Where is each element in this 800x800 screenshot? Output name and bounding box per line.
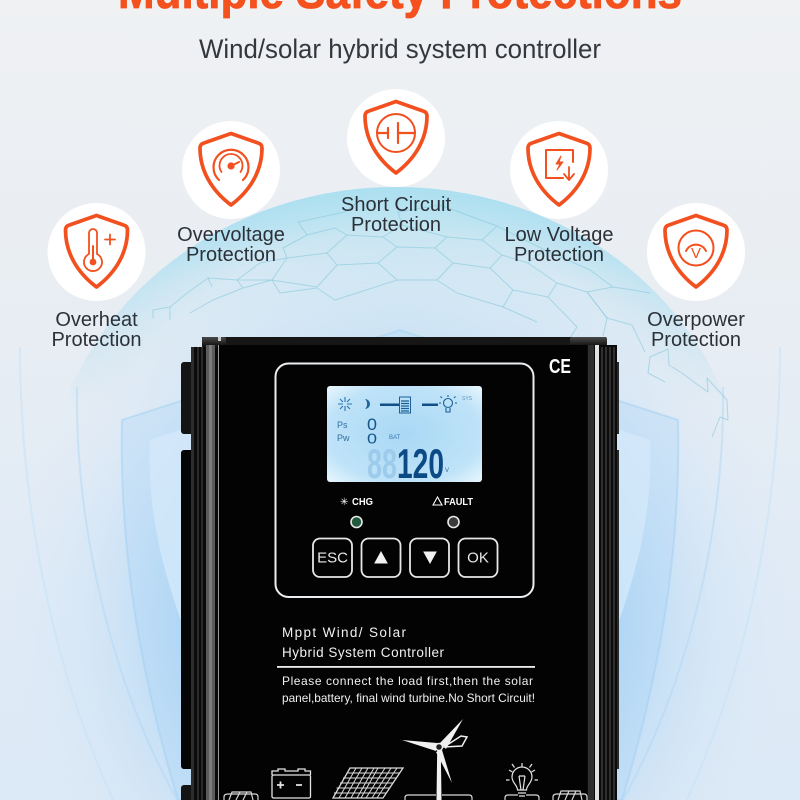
wiring warning: Please connect the load first,then the solar — [282, 674, 533, 688]
lcd: readouts: Ps — [337, 420, 348, 430]
CHG indicator — [340, 497, 373, 528]
icon badge: overheat protection — [48, 203, 146, 301]
top cap — [202, 337, 607, 347]
subtitle: Wind/solar hybrid system controller — [199, 34, 601, 64]
faint background shield outlines — [20, 330, 780, 800]
lcd: readouts: 88 — [367, 440, 397, 487]
divider line — [277, 666, 535, 668]
icon: small solar panel left — [224, 792, 258, 800]
left heat-sink ribs — [191, 345, 220, 800]
wiring warning — [282, 674, 535, 705]
label: low voltage protection: Low Voltage — [505, 224, 613, 246]
lcd: readouts: Pw — [337, 433, 350, 443]
hexagon dome — [74, 187, 728, 438]
lcd: readouts — [337, 396, 473, 487]
label: overvoltage protection — [177, 224, 285, 266]
icon: light bulb — [506, 763, 538, 796]
lcd: readouts: BAT — [389, 435, 401, 441]
lcd: readouts: 0 — [367, 415, 377, 434]
label: overpower protection — [647, 309, 745, 351]
label: overvoltage protection: Protection — [186, 244, 276, 266]
FAULT indicator: FAULT — [444, 497, 473, 508]
button: down — [410, 538, 449, 577]
label: overheat protection: Protection — [51, 329, 142, 351]
icon badge: overpower protection — [647, 203, 745, 301]
lcd: readouts: V — [445, 468, 449, 474]
lcd: readouts: SYS — [462, 396, 473, 402]
icon badge: low voltage protection — [510, 121, 608, 219]
control panel outline — [276, 364, 534, 597]
icon: outlined base shapes — [405, 795, 539, 800]
icon: wind turbine — [402, 719, 467, 800]
CHG indicator: ✳ — [340, 497, 348, 508]
icon: battery — [272, 769, 310, 798]
device name: Mppt Wind/ Solar — [282, 625, 406, 640]
lcd: sun icon — [338, 397, 352, 411]
CE mark: CE — [549, 356, 571, 378]
label: short circuit protection: Protection — [351, 214, 441, 236]
icon badge: overvoltage protection — [182, 121, 280, 219]
label: overpower protection: Protection — [651, 329, 741, 351]
button: OK: OK — [467, 550, 489, 566]
label: overpower protection: Overpower — [647, 309, 745, 331]
lcd: battery icon — [400, 397, 410, 413]
right heat-sink ribs — [587, 345, 617, 800]
label: overheat protection — [51, 309, 142, 351]
lcd: readouts: 0 — [367, 430, 377, 448]
lcd: readouts: 120 — [397, 440, 444, 487]
left mounting tabs — [181, 362, 195, 800]
label: overheat protection: Overheat — [55, 309, 138, 331]
device name: Hybrid System Controller — [282, 645, 444, 660]
label: overvoltage protection: Overvoltage — [177, 224, 285, 246]
label: low voltage protection: Protection — [514, 244, 604, 266]
icon badge: overpower protection: V — [691, 245, 701, 262]
lcd: bulb icon — [439, 395, 457, 412]
CHG indicator: CHG — [352, 497, 373, 508]
front face — [219, 345, 587, 800]
lcd: moon icon — [365, 399, 370, 409]
label: low voltage protection — [505, 224, 613, 266]
icon: solar panel — [333, 768, 403, 798]
device name — [282, 625, 444, 660]
icon badge: short circuit protection — [347, 89, 445, 187]
controller device — [181, 337, 619, 800]
button: ESC: ESC — [317, 550, 348, 566]
label: short circuit protection — [341, 194, 451, 236]
button: OK — [458, 538, 498, 577]
right mounting tabs — [615, 362, 619, 769]
LCD screen — [327, 386, 482, 487]
wiring warning: panel,battery, final wind turbine.No Short Circuit! — [282, 691, 535, 705]
label: short circuit protection: Short Circuit — [341, 194, 451, 216]
button: ESC — [313, 538, 352, 577]
FAULT indicator — [433, 497, 473, 528]
icon: small solar panel right — [553, 791, 587, 800]
button: up — [362, 538, 400, 577]
lcd: flow dashes — [380, 404, 438, 406]
